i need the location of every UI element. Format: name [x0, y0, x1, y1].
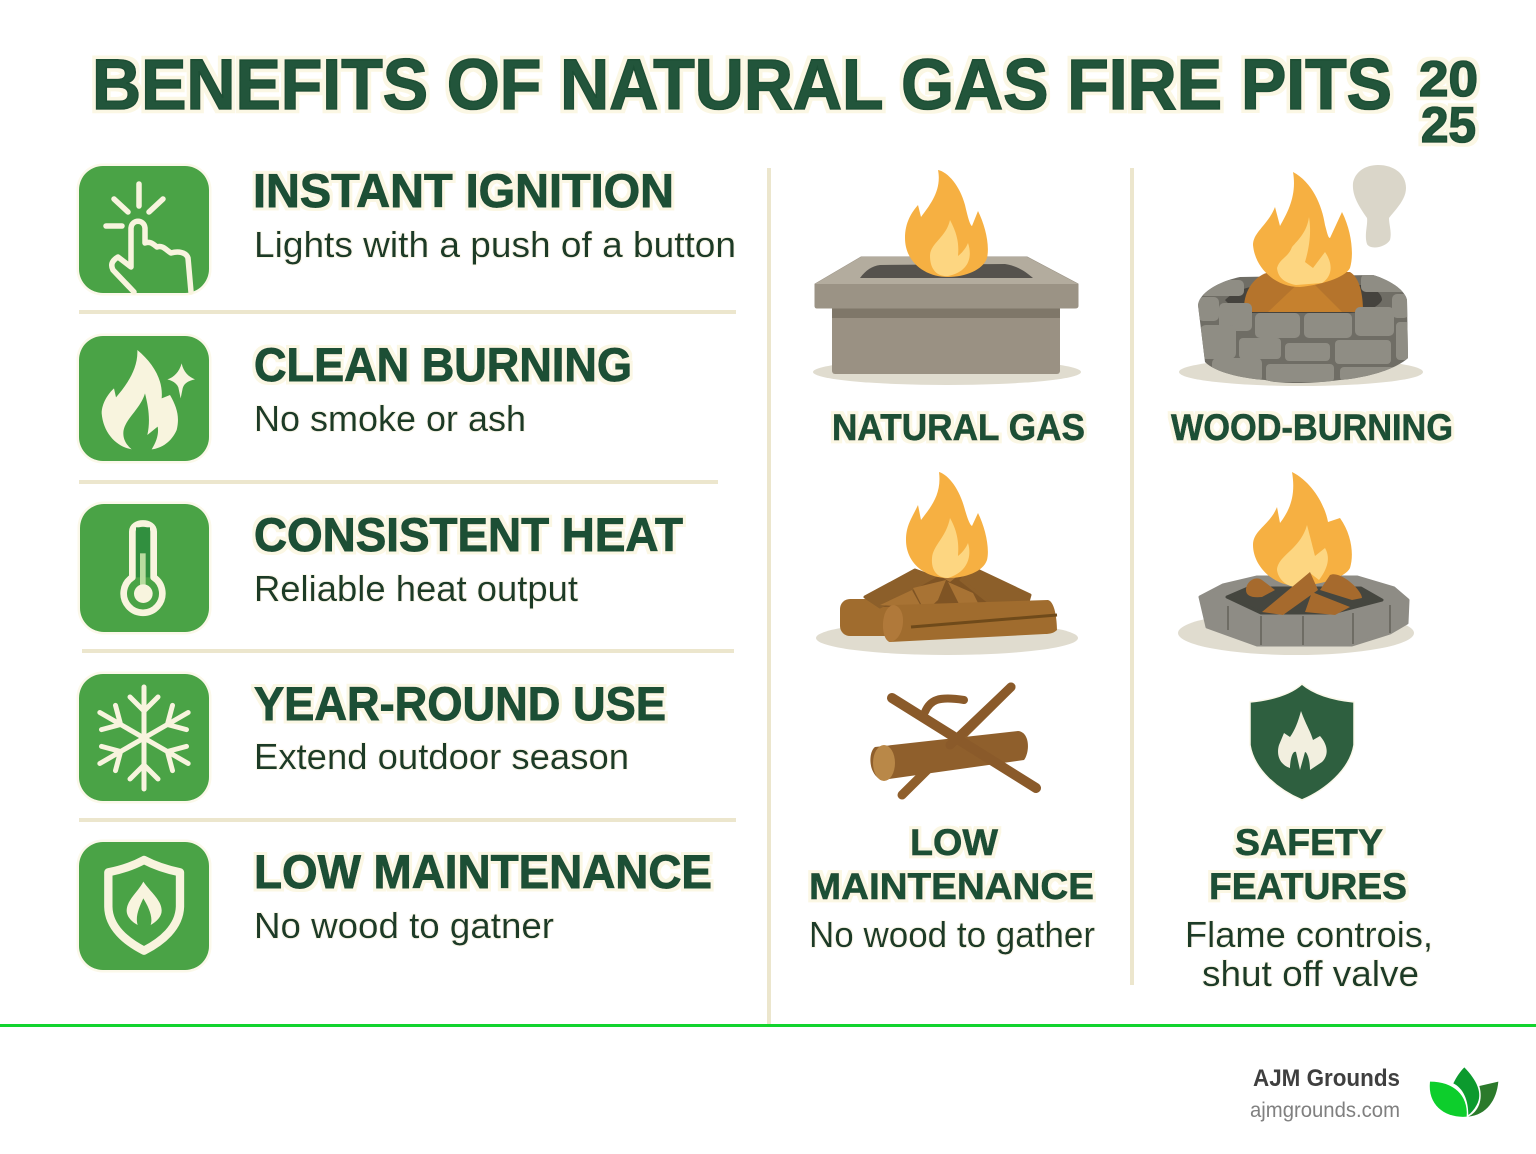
- text: low maintenance: No wood to gather: [809, 914, 1095, 955]
- year 2025: 25: [1421, 97, 1476, 153]
- illustration: wood-burning fire pit with smoke: [1179, 165, 1423, 386]
- logo: leaves: [1430, 1067, 1498, 1117]
- benefit: clean burning: [79, 336, 632, 461]
- title: BENEFITS OF NATURAL GAS FIRE PITS: [92, 46, 1392, 125]
- text: safety features: shut off valve: [1202, 953, 1419, 994]
- text: low maintenance: MAINTENANCE: [809, 866, 1094, 907]
- illustration: stone ring fire pit: [1178, 472, 1414, 655]
- footer brand: [1250, 1065, 1498, 1122]
- text: safety features: SAFETY: [1235, 822, 1383, 863]
- text: safety features: Flame controis,: [1185, 914, 1433, 955]
- heading: YEAR-ROUND USE: [254, 677, 666, 730]
- text: safety features: FEATURES: [1209, 866, 1407, 907]
- description: Lights with a push of a button: [254, 224, 736, 265]
- description: No wood to gatner: [254, 905, 554, 946]
- icon: finger pressing button: [79, 166, 209, 293]
- icon: flame with sparkle: [79, 336, 209, 461]
- illustration: safety shield: [1250, 684, 1354, 800]
- heading: LOW MAINTENANCE: [254, 845, 712, 898]
- year 2025: [1419, 51, 1478, 153]
- icon: thermometer: [80, 504, 209, 632]
- illustration: campfire logs: [816, 472, 1078, 655]
- description: Extend outdoor season: [254, 736, 629, 777]
- heading: INSTANT IGNITION: [253, 164, 674, 217]
- icon: snowflake: [79, 674, 209, 801]
- panel: comparison illustrations: [809, 165, 1453, 994]
- illustration: crossed logs: [870, 687, 1036, 795]
- benefit: low maintenance: [79, 842, 712, 970]
- benefit: year-round use: [79, 674, 666, 801]
- label: NATURAL GAS: [832, 407, 1085, 448]
- brand name: AJM Grounds: [1253, 1065, 1400, 1092]
- text: safety features: [1185, 822, 1433, 994]
- text: low maintenance: LOW: [910, 822, 998, 863]
- website: ajmgrounds.com: [1250, 1099, 1400, 1122]
- description: No smoke or ash: [254, 398, 526, 439]
- text: low maintenance: [809, 822, 1095, 955]
- description: Reliable heat output: [254, 568, 578, 609]
- benefit: instant ignition: [79, 164, 736, 293]
- heading: CLEAN BURNING: [254, 338, 632, 391]
- illustration: natural gas fire pit: [813, 170, 1081, 385]
- icon: shield with flame: [79, 842, 209, 970]
- heading: CONSISTENT HEAT: [254, 508, 683, 561]
- year 2025: 20: [1419, 51, 1478, 107]
- panel: benefits list: [79, 164, 736, 970]
- label: WOOD-BURNING: [1171, 407, 1453, 448]
- benefit: consistent heat: [80, 504, 683, 632]
